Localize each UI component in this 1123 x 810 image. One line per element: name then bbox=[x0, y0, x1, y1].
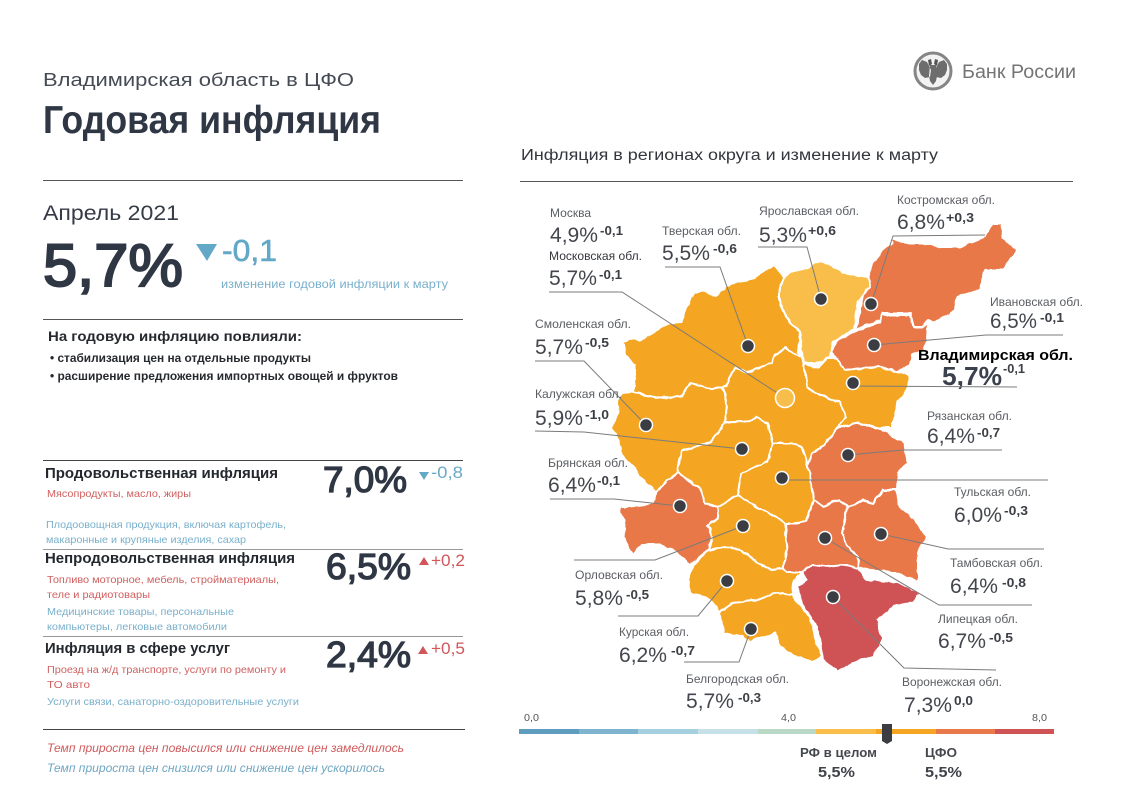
label: Тульская обл.: 6,0% bbox=[954, 504, 1002, 527]
panel: food inflation: -0,8 bbox=[431, 463, 463, 482]
label: Тверская обл. bbox=[662, 224, 748, 346]
label: Рязанская обл.: -0,7 bbox=[977, 425, 1000, 440]
label: Ивановская обл.: Ивановская обл. bbox=[990, 295, 1083, 309]
label: Ярославская обл. bbox=[758, 204, 859, 299]
label: Брянская обл.: Брянская обл. bbox=[548, 456, 628, 470]
label: Владимирская обл. (highlighted): 5,7% bbox=[942, 361, 1002, 391]
logo: Bank of Russia bbox=[915, 53, 1076, 89]
label: Смоленская обл.: -0,5 bbox=[585, 335, 609, 350]
label: Воронежская обл. bbox=[833, 597, 1002, 717]
label: Владимирская обл. (highlighted): -0,1 bbox=[1003, 362, 1025, 376]
label: Костромская обл. bbox=[871, 193, 995, 304]
label: Калужская обл. bbox=[535, 387, 742, 449]
change versus March bbox=[196, 233, 448, 291]
panel: services inflation: Проезд на ж/д транспорте, услуги по ремонту и bbox=[47, 664, 286, 676]
panel: food inflation bbox=[45, 459, 463, 546]
panel: services inflation bbox=[45, 634, 465, 708]
label: Костромская обл.: 6,8% bbox=[897, 211, 945, 234]
map: regions of the Central Federal District bbox=[612, 223, 1017, 672]
label: Тульская обл.: Тульская обл. bbox=[954, 485, 1031, 499]
label: Тверская обл.: -0,6 bbox=[713, 241, 737, 256]
label: Липецкая обл.: 6,7% bbox=[938, 630, 986, 653]
label: Ярославская обл.: Ярославская обл. bbox=[759, 204, 859, 218]
label: Липецкая обл. bbox=[825, 538, 1032, 653]
label: Ярославская обл.: 5,3% bbox=[759, 224, 807, 247]
label: Москва bbox=[550, 206, 623, 247]
logo: Bank of Russia: Банк России bbox=[962, 62, 1076, 83]
label: Орловская обл.: Орловская обл. bbox=[575, 568, 663, 582]
panel: food inflation: макаронные и крупяные изделия, сахар bbox=[46, 534, 246, 546]
label: Смоленская обл.: Смоленская обл. bbox=[535, 317, 631, 331]
label: Брянская обл.: -0,1 bbox=[597, 473, 620, 488]
label: Воронежская обл.: 0,0 bbox=[954, 693, 973, 708]
label: Тамбовская обл.: 6,4% bbox=[950, 575, 998, 598]
label: Рязанская обл. bbox=[848, 409, 1012, 455]
heading: map panel: Инфляция в регионах округа и изменение к марту bbox=[521, 147, 938, 164]
panel: non-food inflation: теле и радиотовары bbox=[47, 589, 150, 601]
scale label: CFD: ЦФО bbox=[925, 745, 957, 760]
subtitle: region: Владимирская область в ЦФО bbox=[43, 69, 354, 90]
label: Смоленская обл.: 5,7% bbox=[535, 336, 583, 359]
label: Калужская обл.: -1,0 bbox=[585, 407, 609, 422]
label: Курская обл. bbox=[618, 581, 727, 667]
label: Белгородская обл.: 5,7% bbox=[686, 690, 734, 713]
colour scale: 0,0 bbox=[524, 713, 539, 724]
label: Тверская обл.: Тверская обл. bbox=[662, 224, 741, 238]
panel: non-food inflation: компьютеры, легковые автомобили bbox=[47, 621, 227, 633]
panel: food inflation: Плодоовощная продукция, включая картофель, bbox=[46, 519, 286, 531]
label: Тамбовская обл.: -0,8 bbox=[1002, 575, 1026, 590]
scale label: Russia overall bbox=[800, 746, 877, 781]
label: Орловская обл.: 5,8% bbox=[575, 587, 623, 610]
label: Курская обл.: Курская обл. bbox=[619, 625, 689, 639]
label: Москва: Москва bbox=[550, 206, 591, 220]
label: Курская обл.: -0,7 bbox=[671, 643, 695, 658]
label: Смоленская обл. bbox=[535, 317, 646, 425]
label: Калужская обл.: Калужская обл. bbox=[535, 387, 622, 401]
map markers bbox=[640, 292, 888, 636]
panel: services inflation: 2,4% bbox=[326, 634, 411, 675]
label: Московская обл.: -0,1 bbox=[599, 267, 622, 282]
panel: food inflation: 7,0% bbox=[323, 459, 407, 500]
text block: factors: • расширение предложения импортных овощей и фруктов bbox=[50, 371, 398, 383]
panel: non-food inflation: Непродовольственная инфляция bbox=[45, 551, 295, 567]
label: Москва: 4,9% bbox=[550, 224, 598, 247]
label: Тамбовская обл. bbox=[881, 534, 1044, 598]
label: Тульская обл. bbox=[782, 480, 1048, 527]
period label: Апрель 2021 bbox=[43, 202, 179, 225]
label: Калужская обл.: 5,9% bbox=[535, 407, 583, 430]
label: Курская обл.: 6,2% bbox=[619, 644, 667, 667]
colour scale: 8,0 bbox=[1032, 713, 1047, 724]
panel: non-food inflation: 6,5% bbox=[326, 546, 411, 587]
label: Владимирская обл. (highlighted): Владимирская обл. bbox=[918, 347, 1073, 364]
panel: services inflation: Услуги связи, санаторно-оздоровительные услуги bbox=[47, 696, 299, 708]
panel: services inflation: ТО авто bbox=[47, 679, 90, 691]
label: Ивановская обл. bbox=[874, 295, 1083, 345]
headline inflation value: 5,7% bbox=[43, 232, 183, 299]
label: Ивановская обл.: -0,1 bbox=[1040, 310, 1064, 325]
legend: colour meaning notes: Темп прироста цен повысился или снижение цен замедлилось bbox=[47, 741, 404, 755]
label: Липецкая обл.: -0,5 bbox=[989, 630, 1013, 645]
label: Ярославская обл.: +0,6 bbox=[808, 223, 836, 238]
label: Московская обл. bbox=[549, 249, 785, 398]
text block: factors: На годовую инфляцию повлияли: bbox=[48, 328, 302, 344]
panel: non-food inflation: +0,2 bbox=[431, 551, 465, 570]
label: Орловская обл.: -0,5 bbox=[626, 587, 649, 602]
label: Рязанская обл.: 6,4% bbox=[927, 425, 975, 448]
panel: services inflation: Инфляция в сфере услуг bbox=[45, 641, 230, 657]
label: Липецкая обл.: Липецкая обл. bbox=[938, 612, 1018, 626]
label: Тульская обл.: -0,3 bbox=[1004, 503, 1028, 518]
label: Ивановская обл.: 6,5% bbox=[990, 310, 1037, 333]
label: Белгородская обл.: -0,3 bbox=[738, 690, 761, 705]
text block: factors bbox=[48, 328, 398, 383]
label: Рязанская обл.: Рязанская обл. bbox=[927, 409, 1012, 423]
title: Годовая инфляция bbox=[43, 99, 381, 142]
label: Белгородская обл. bbox=[684, 629, 789, 713]
label: Брянская обл.: 6,4% bbox=[548, 474, 596, 497]
label: Московская обл.: 5,7% bbox=[549, 267, 597, 290]
legend: colour meaning notes: Темп прироста цен снизился или снижение цен ускорилось bbox=[47, 761, 385, 775]
change versus March: -0,1 bbox=[222, 233, 277, 268]
scale label: Russia overall: РФ в целом bbox=[800, 746, 877, 760]
label: Московская обл.: Московская обл. bbox=[549, 249, 642, 263]
label: Костромская обл.: Костромская обл. bbox=[897, 193, 995, 207]
panel: non-food inflation: Топливо моторное, мебель, стройматериалы, bbox=[47, 574, 279, 586]
label: Москва: -0,1 bbox=[600, 223, 623, 238]
scale label: Russia overall: 5,5% bbox=[818, 764, 855, 781]
label: Воронежская обл.: Воронежская обл. bbox=[902, 675, 1002, 689]
panel: services inflation: +0,5 bbox=[431, 639, 465, 658]
label: Тверская обл.: 5,5% bbox=[662, 242, 710, 265]
label: Костромская обл.: +0,3 bbox=[946, 210, 974, 225]
label: Брянская обл. bbox=[548, 456, 680, 506]
scale label: CFD bbox=[925, 745, 962, 781]
scale marker bbox=[882, 724, 892, 744]
text block: factors: • стабилизация цен на отдельные продукты bbox=[50, 353, 311, 365]
panel: food inflation: Продовольственная инфляция bbox=[45, 466, 278, 482]
label: Владимирская обл. (highlighted) bbox=[853, 347, 1073, 391]
panel: non-food inflation: Медицинские товары, персональные bbox=[47, 606, 234, 618]
panel: food inflation: Мясопродукты, масло, жиры bbox=[47, 488, 191, 500]
label: Белгородская обл.: Белгородская обл. bbox=[686, 672, 789, 686]
panel: non-food inflation bbox=[45, 546, 465, 633]
colour scale: 4,0 bbox=[781, 713, 796, 724]
colour scale bbox=[519, 713, 1054, 734]
legend: colour meaning notes bbox=[47, 741, 404, 775]
change versus March: изменение годовой инфляции к марту bbox=[221, 277, 448, 291]
label: Орловская обл. bbox=[574, 526, 743, 610]
label: Воронежская обл.: 7,3% bbox=[904, 694, 952, 717]
label: Тамбовская обл.: Тамбовская обл. bbox=[950, 556, 1043, 570]
scale label: CFD: 5,5% bbox=[925, 764, 962, 781]
